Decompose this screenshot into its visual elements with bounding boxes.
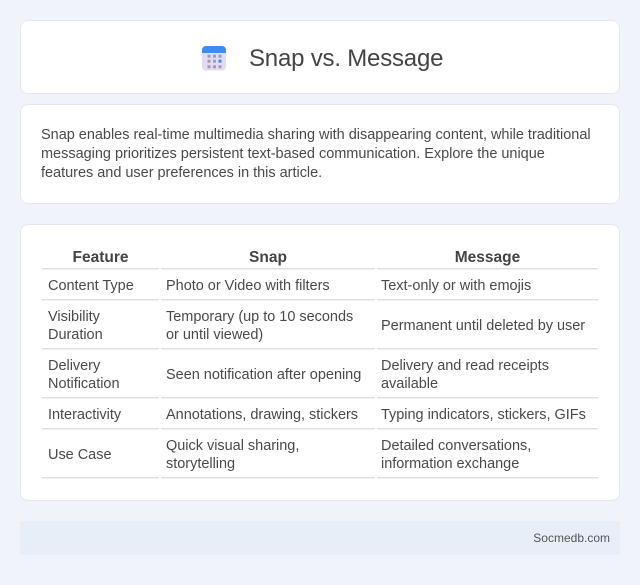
row: interactivity: Interactivity [48,407,121,423]
intro text: features and user preferences in this article. [41,165,322,181]
panel: introduction [20,104,620,204]
row: use case: storytelling [166,456,235,472]
row: visibility duration [48,309,585,343]
row: use case: Quick visual sharing, [166,438,299,454]
table header [72,249,520,266]
row: visibility duration: Permanent until deleted by user [381,318,585,334]
row: delivery notification: Delivery and read receipts [381,358,549,374]
row: delivery notification [48,358,549,392]
row: delivery notification: Seen notification after opening [166,367,361,383]
title: Snap vs. Message [249,45,443,72]
row: use case [48,438,531,472]
row: interactivity: Annotations, drawing, stickers [166,407,358,423]
row: interactivity [48,407,586,423]
row: visibility duration: Duration [48,327,103,343]
row: content type: Photo or Video with filters [166,278,330,294]
panel: comparison table [20,224,620,501]
row: delivery notification: Delivery [48,358,100,374]
row: delivery notification: available [381,376,438,392]
row: visibility duration: Temporary (up to 10 seconds [166,309,353,325]
row: interactivity: Typing indicators, stickers, GIFs [381,407,586,423]
row: visibility duration: or until viewed) [166,327,263,343]
row: content type: Text-only or with emojis [381,278,531,294]
table header: Message [455,249,520,266]
footer text: Socmedb.com [533,531,610,545]
footer bar [20,521,620,555]
table header: Feature [72,249,128,266]
row: use case: information exchange [381,456,519,472]
row: visibility duration: Visibility [48,309,100,325]
intro text: messaging prioritizes persistent text-based communication. Explore the unique [41,146,545,162]
row: delivery notification: Notification [48,376,120,392]
intro text [41,127,591,181]
row: content type: Content Type [48,278,134,294]
row: use case: Use Case [48,447,112,463]
icon: calendar [202,46,226,70]
intro text: Snap enables real-time multimedia sharing with disappearing content, while traditional [41,127,591,143]
row: content type [48,278,531,294]
panel: title card [20,20,620,94]
row: use case: Detailed conversations, [381,438,531,454]
table header: Snap [249,249,287,266]
